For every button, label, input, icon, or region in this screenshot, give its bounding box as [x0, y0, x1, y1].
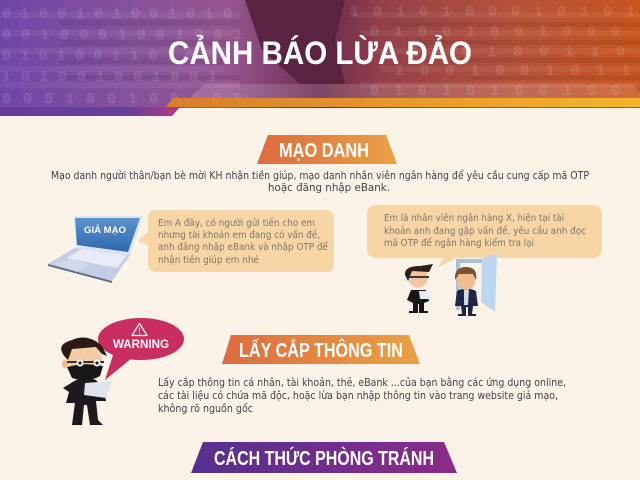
binary digits: 0 1 0 0 1 0 1 0 0 1 0 1 0 — [2, 6, 232, 23]
text block: lấy cắp description: Lấy cắp thông tin cá nhân, tài khoản, thẻ, eBank ...của bạn bằng các ứng dụng online, — [158, 376, 566, 389]
binary digits — [2, 4, 635, 108]
speech bubble: fake bank employee — [367, 205, 602, 268]
icon: open door — [456, 253, 497, 312]
speech bubble: fake relative: nhưng tài khoản em đang có vấn đề, — [158, 229, 320, 241]
binary digits: 1 0 0 1 0 0 1 0 1 1 — [395, 63, 630, 80]
icon: laptop — [48, 216, 143, 283]
title: CẢNH BÁO LỪA ĐẢO — [168, 35, 472, 71]
speech bubble: fake relative: nhận tiền giúp em nhé — [158, 254, 259, 266]
heading: mạo danh: MẠO DANH — [279, 140, 369, 162]
purple ribbon — [0, 107, 180, 116]
text block: lấy cắp description: các tài liệu có chứa mã độc, hoặc lừa bạn nhập thông tin vào trang website giả mạo, — [158, 390, 558, 402]
speech bubble: fake bank employee: khoản anh đang gặp vấn đề, yêu cầu anh đọc — [384, 225, 586, 237]
icon: warning triangle — [132, 324, 147, 336]
text block: mạo danh description: hoặc đăng nhập eBank. — [268, 182, 390, 194]
binary digits: 0 0 0 1 0 0 1 0 0 1 0 0 — [2, 91, 242, 108]
binary digits: 0 1 1 0 1 0 0 1 1 0 — [385, 44, 625, 61]
callout: warning bubble: WARNING — [113, 339, 169, 351]
text block: mạo danh description — [51, 169, 589, 194]
heading: mạo danh — [257, 135, 397, 164]
dark central corridor — [245, 0, 345, 84]
speech bubble: fake relative: anh đăng nhập eBank và nhập OTP để — [158, 240, 328, 253]
heading: lấy cắp thông tin: LẤY CẮP THÔNG TIN — [239, 338, 403, 362]
gold ribbon — [166, 98, 640, 107]
icon: man in blue jacket — [455, 267, 478, 316]
speech bubble: fake bank employee: Em là nhân viên ngân hàng X, hiện tại tài — [384, 212, 564, 224]
speech bubble: fake bank employee: mã OTP để ngân hàng kiểm tra lại — [384, 236, 534, 249]
icon: masked hacker with tablet — [61, 338, 112, 425]
speech bubble: fake relative — [138, 210, 334, 272]
text block: lấy cắp description — [158, 376, 566, 415]
icon: man with glasses holding paper — [405, 264, 433, 313]
heading: cách thức phòng tránh — [191, 442, 457, 473]
lighter lower band — [190, 84, 640, 98]
binary digits: 1 0 1 0 0 1 0 0 1 0 0 1 — [2, 69, 217, 86]
heading: cách thức phòng tránh: CÁCH THỨC PHÒNG TRÁNH — [214, 446, 434, 470]
binary digits: 1 0 1 0 1 0 0 0 1 0 1 0 1 — [350, 4, 635, 21]
speech bubble: fake relative: Em A đây, có người gửi tiền cho em — [158, 217, 315, 229]
binary digits: 0 0 1 0 0 0 1 0 0 1 0 0 1 — [2, 27, 242, 44]
text block: lấy cắp description: không rõ nguồn gốc — [158, 403, 253, 415]
callout: warning bubble — [98, 318, 184, 380]
icon: laptop: GIẢ MẠO — [84, 224, 126, 236]
binary digits: 0 1 0 0 1 0 0 1 0 0 0 — [370, 24, 620, 41]
binary digits: 0 1 0 1 0 1 0 0 1 0 0 — [370, 83, 620, 100]
heading: lấy cắp thông tin — [222, 335, 420, 364]
binary digits: 0 1 0 1 0 0 1 1 0 1 0 0 — [2, 48, 212, 65]
header banner with binary code image — [0, 0, 640, 108]
text block: mạo danh description: Mạo danh người thân/bạn bè mời KH nhận tiền giúp, mạo danh nhân viên ngân hàng để yêu cầu cung cấp mã OTP — [51, 169, 589, 182]
